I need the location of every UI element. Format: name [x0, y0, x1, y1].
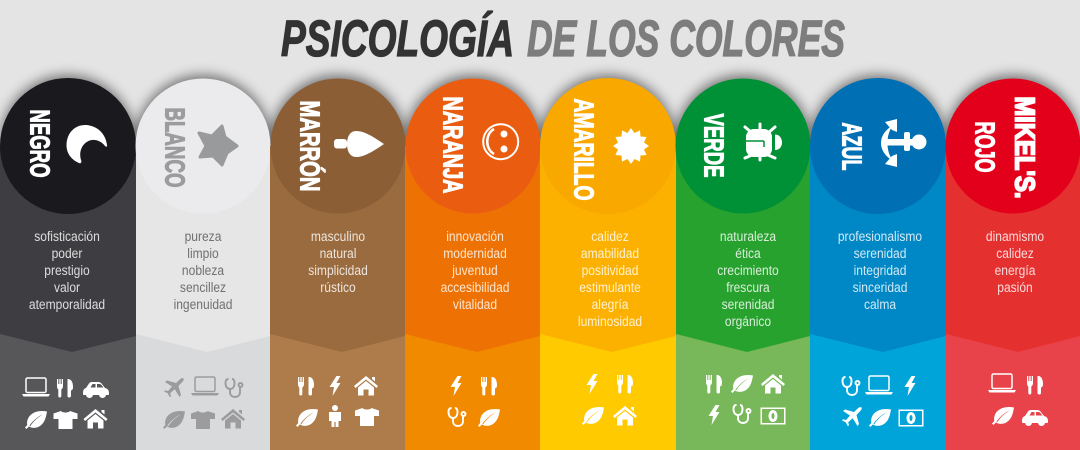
list: marrón	[308, 228, 368, 295]
list: naranja: innovación	[446, 228, 504, 244]
panel: verde	[676, 78, 810, 450]
list: rojo: dinamismo	[986, 228, 1044, 244]
icon: moon	[66, 125, 107, 163]
list: azul: profesionalismo	[838, 228, 922, 244]
list: amarillo: luminosidad	[578, 313, 642, 329]
list: rojo	[986, 228, 1044, 295]
list: marrón: masculino	[311, 228, 365, 244]
list: negro: poder	[52, 245, 83, 261]
list: azul: sinceridad	[853, 279, 907, 295]
label: verde: VERDE	[698, 114, 730, 178]
list: negro: sofisticación	[34, 228, 100, 244]
logo: mikel's: MIKEL'S.	[1010, 96, 1040, 198]
circle drop shadows	[0, 75, 1080, 211]
icon: bug	[745, 124, 782, 160]
label: azul: AZUL	[836, 122, 868, 170]
list: blanco: pureza	[185, 228, 222, 244]
list: negro	[29, 228, 105, 312]
label: blanco: BLANCO	[160, 108, 190, 188]
list: azul: serenidad	[854, 245, 906, 261]
list: amarillo: calidez	[591, 228, 629, 244]
list: amarillo	[578, 228, 642, 329]
list: amarillo: alegría	[592, 296, 629, 312]
panel: azul	[810, 78, 946, 450]
list: naranja: juventud	[451, 262, 498, 278]
icons: rojo	[988, 374, 1048, 426]
icon: brush tip	[334, 131, 384, 157]
title: PSICOLOGÍA	[281, 10, 514, 67]
title	[281, 10, 845, 67]
list: blanco: nobleza	[182, 262, 225, 278]
label: naranja: NARANJA	[438, 96, 468, 194]
label: negro: NEGRO	[24, 110, 56, 178]
panel: rojo	[946, 78, 1080, 450]
panel: negro	[0, 78, 136, 450]
list: blanco: sencillez	[180, 279, 226, 295]
list: blanco	[174, 228, 232, 312]
list: rojo: energía	[995, 262, 1036, 278]
list: azul: calma	[864, 296, 897, 312]
panel: amarillo	[540, 78, 676, 450]
list: naranja	[441, 228, 509, 312]
icons: verde	[706, 374, 786, 425]
list: amarillo: amabilidad	[581, 245, 639, 261]
list: marrón: simplicidad	[308, 262, 368, 278]
label: amarillo: AMARILLO	[568, 98, 600, 200]
icon: anchor	[881, 119, 926, 167]
list: amarillo: estimulante	[579, 279, 641, 295]
panel: blanco	[136, 78, 270, 450]
list: naranja: accesibilidad	[441, 279, 509, 295]
list: naranja: modernidad	[443, 245, 507, 261]
list: amarillo: positividad	[582, 262, 638, 278]
list: rojo: pasión	[997, 279, 1033, 295]
list: marrón: natural	[320, 245, 356, 261]
list: verde: serenidad	[722, 296, 774, 312]
list: blanco: ingenuidad	[174, 296, 232, 312]
icons: amarillo	[582, 374, 637, 426]
icons: marrón	[296, 376, 379, 427]
list: verde: naturaleza	[720, 228, 777, 244]
list: blanco: limpio	[187, 245, 219, 261]
label: marrón: MARRÓN	[294, 100, 326, 192]
icon: star	[199, 126, 237, 165]
list: verde: orgánico	[725, 313, 771, 329]
panel: naranja	[405, 78, 540, 450]
list: negro: valor	[54, 279, 81, 295]
list: verde: crecimiento	[717, 262, 779, 278]
icons: azul	[842, 376, 924, 427]
label: rojo: ROJO	[970, 122, 1000, 172]
list: azul: integridad	[854, 262, 906, 278]
title: DE LOS COLORES	[527, 10, 845, 67]
icon: smiley	[483, 124, 518, 159]
list: negro: prestigio	[44, 262, 90, 278]
list: negro: atemporalidad	[29, 296, 105, 312]
icon: sun	[613, 128, 649, 164]
list: azul	[838, 228, 922, 312]
list: marrón: rústico	[320, 279, 356, 295]
list: naranja: vitalidad	[453, 296, 497, 312]
icons: negro	[22, 378, 109, 429]
list: verde: ética	[735, 245, 761, 261]
icons: blanco	[163, 377, 245, 429]
icons: naranja	[448, 376, 500, 427]
panel: marrón	[270, 78, 406, 450]
list: verde	[717, 228, 779, 329]
list: verde: frescura	[726, 279, 770, 295]
list: rojo: calidez	[996, 245, 1034, 261]
